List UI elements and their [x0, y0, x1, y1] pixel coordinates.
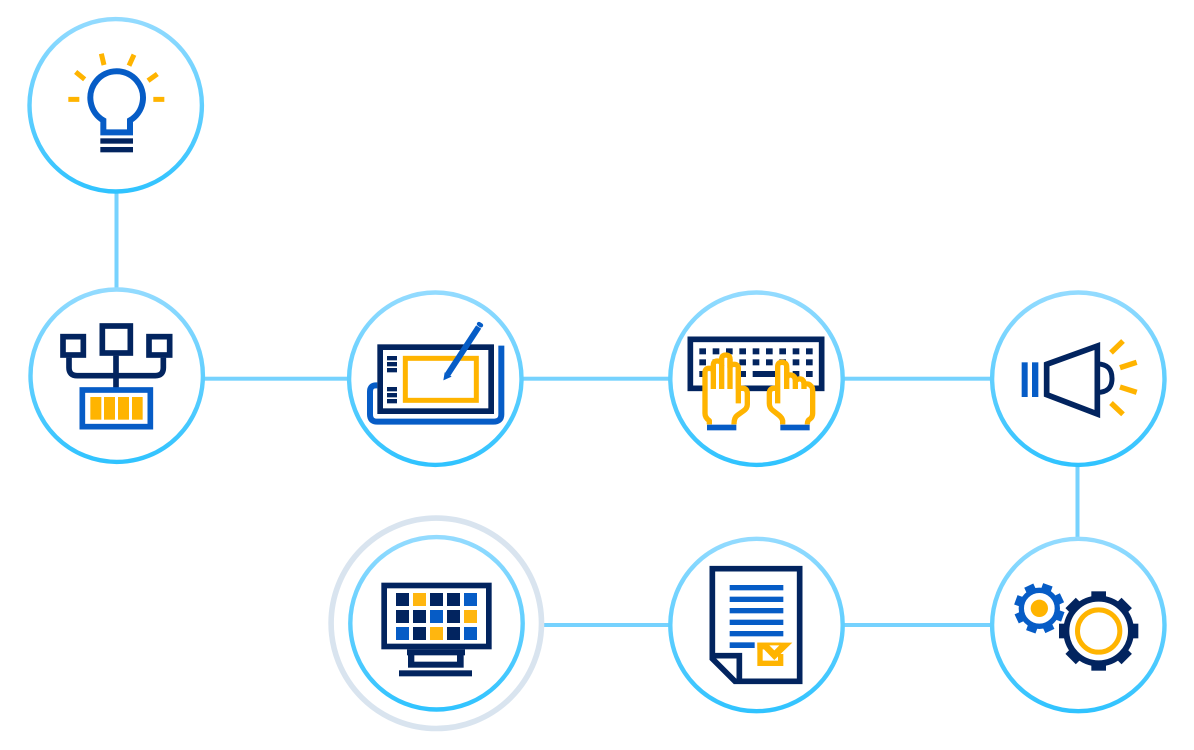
icon: hands on keyboard — [690, 339, 822, 430]
small gear — [1014, 583, 1065, 634]
step 5: announcement — [992, 292, 1164, 465]
icon: gears — [1014, 583, 1138, 671]
icon: monitor with tiles — [384, 585, 489, 676]
large gear — [1059, 591, 1138, 671]
step 2: network structure — [30, 290, 203, 462]
step 6: settings — [992, 539, 1164, 711]
step 1: idea — [30, 19, 202, 192]
connector lines — [114, 190, 1080, 627]
icon: tablet and pen — [370, 324, 501, 422]
icon: light bulb — [68, 54, 164, 152]
icon: hierarchy — [63, 326, 170, 427]
step 8: dashboard monitor (highlighted) — [331, 518, 542, 728]
step 3: drawing tablet — [349, 292, 522, 465]
icon: document with check mark — [712, 569, 800, 681]
step 7: document review — [670, 539, 843, 711]
icon: megaphone — [1022, 341, 1137, 414]
step 4: keyboard input — [670, 292, 843, 465]
